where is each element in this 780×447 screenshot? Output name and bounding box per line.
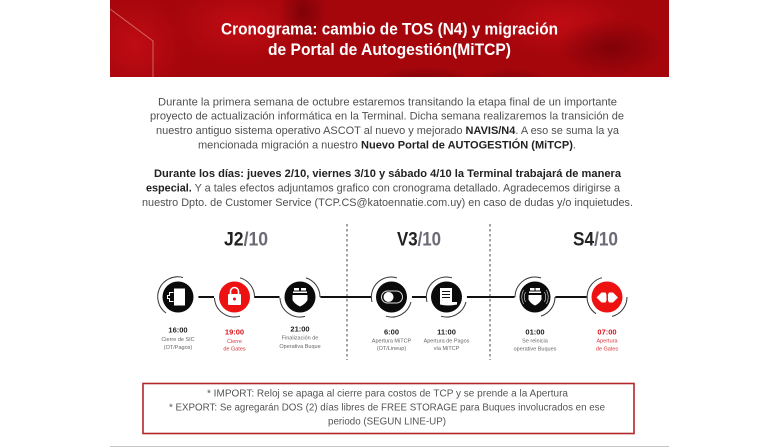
milestone: 6:00: (OT/Lineup) (377, 346, 406, 352)
intro paragraph (150, 96, 624, 152)
milestone: 16:00: (OT/Pagos) (164, 345, 192, 351)
icon: ship with signal (522, 288, 548, 306)
milestone: 19:00 (214, 276, 255, 352)
callout: import/export notes: periodo (SEGUN LINE-UP) (328, 416, 446, 428)
milestone: 01:00 (514, 276, 557, 352)
milestone: 21:00: Finalización de (282, 336, 318, 342)
milestone: 11:00: Apertura de Pagos (424, 338, 470, 344)
schedule paragraph: Durante los días: jueves 2/10, viernes 3/10 y sábado 4/10 la Terminal trabajará de manera (154, 168, 622, 180)
milestone: 01:00: 01:00 (525, 328, 545, 336)
day heading: S4/10: S4/10 (573, 228, 618, 250)
milestone: 07:00: de Gates (596, 346, 618, 352)
milestone: 11:00 (424, 276, 470, 352)
header banner (110, 0, 669, 77)
milestone: 01:00: operative Buques (514, 346, 557, 352)
icon: door (168, 288, 185, 306)
intro paragraph: mencionada migración a nuestro Nuevo Portal de AUTOGESTIÓN (MiTCP). (198, 138, 576, 152)
milestone: 11:00: 11:00 (437, 328, 456, 336)
title (221, 20, 558, 59)
milestone: 6:00: 6:00 (384, 328, 399, 336)
milestone: 16:00 (158, 276, 198, 351)
icon: opening gates arrows (596, 292, 618, 302)
timeline line (178, 296, 607, 298)
milestone: 19:00: Cierre (227, 339, 242, 345)
milestone: 19:00: de Gates (223, 346, 246, 352)
milestone: 07:00: Apertura (596, 338, 618, 344)
title: Cronograma: cambio de TOS (N4) y migración (221, 20, 558, 38)
icon: ship (292, 288, 308, 306)
day heading: V3/10: V3/10 (397, 228, 441, 250)
milestone: 11:00: vía MiTCP (434, 346, 460, 352)
title: de Portal de Autogestión(MiTCP) (268, 41, 511, 59)
milestone: 19:00: 19:00 (225, 328, 244, 336)
callout: import/export notes (143, 384, 634, 434)
milestone: 6:00 (371, 276, 412, 352)
milestone: 21:00 (279, 276, 321, 350)
intro paragraph: proyecto de actualización informática en la Terminal. Dicha semana realizaremos la transición de (150, 110, 624, 122)
milestone: 6:00: Apertura MiTCP (372, 338, 412, 344)
schedule paragraph: especial. Y a tales efectos adjuntamos grafico con cronograma detallado. Agradecemos dirigirse a (146, 182, 621, 194)
callout: import/export notes: * IMPORT: Reloj se apaga al cierre para costos de TCP y se prende a la Apertura (207, 388, 568, 400)
day heading: J2/10: J2/10 (224, 228, 268, 250)
milestone: 21:00: 21:00 (290, 324, 310, 334)
icon: toggle switch (382, 291, 402, 303)
schedule paragraph (142, 168, 633, 209)
milestone: 01:00: Se reinicia (522, 338, 549, 344)
milestone: 16:00: Cierre de SIC (161, 337, 195, 343)
callout: import/export notes: * EXPORT: Se agregarán DOS (2) días libres de FREE STORAGE para Buques involucrados en ese (169, 402, 605, 414)
milestone: 07:00 (586, 276, 628, 352)
icon: document (440, 288, 457, 306)
schedule paragraph: nuestro Dpto. de Customer Service (TCP.CS@katoennatie.com.uy) en caso de dudas y/o inquietudes. (142, 197, 633, 209)
day separators (347, 224, 490, 360)
icon: padlock (228, 288, 241, 305)
milestone: 21:00: Operativa Buque (279, 344, 321, 350)
milestone: 16:00: 16:00 (168, 326, 188, 334)
milestone: 07:00: 07:00 (597, 328, 617, 336)
intro paragraph: Durante la primera semana de octubre estaremos transitando la etapa final de un importante (158, 96, 617, 108)
intro paragraph: nuestro antiguo sistema operativo ASCOT al nuevo y mejorado NAVIS/N4. A eso se suma la ya (156, 125, 620, 137)
